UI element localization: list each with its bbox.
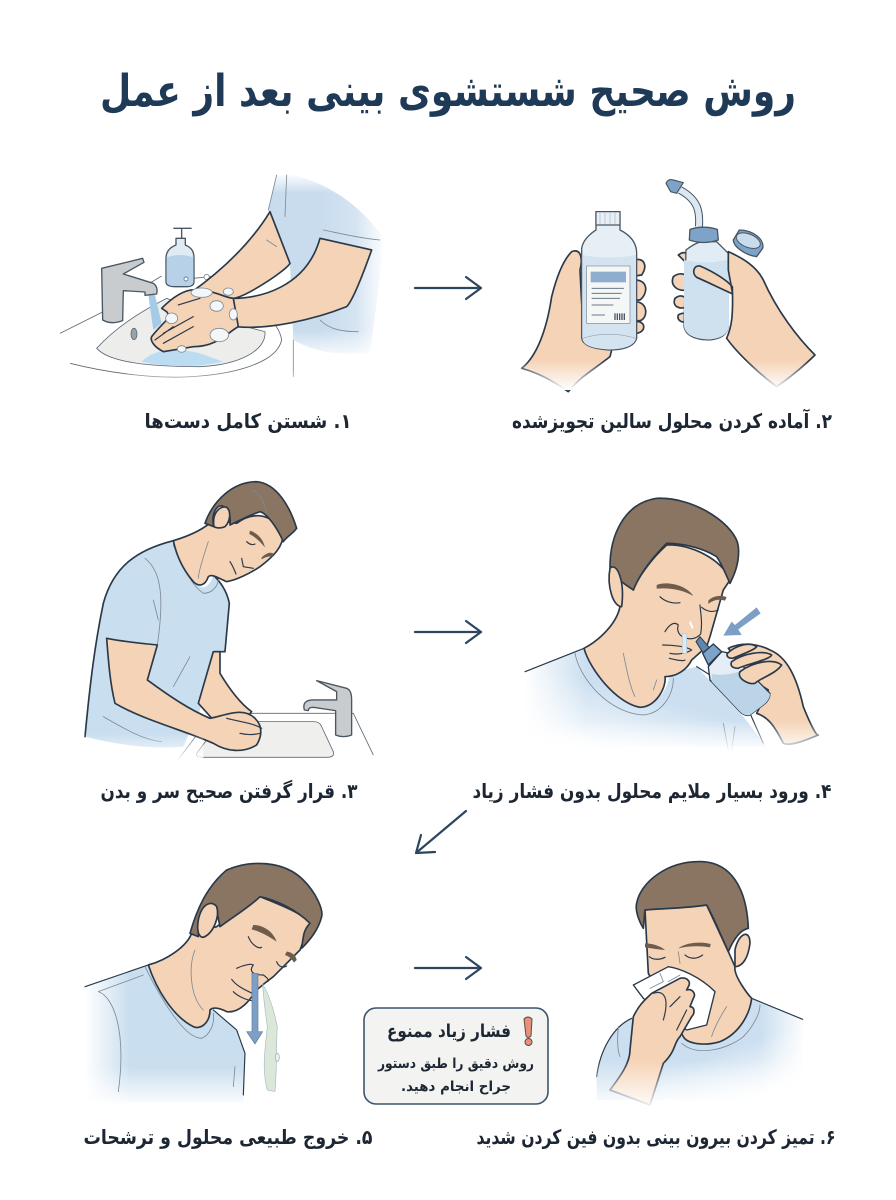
arrow 3 to 4	[415, 621, 481, 643]
callout body: جراح انجام دهید.	[401, 1079, 511, 1095]
illustration: man wiping nose with tissue	[590, 862, 807, 1110]
illustration: hands holding saline bottles	[520, 180, 820, 392]
illustration: man rinsing nose with bottle	[520, 498, 823, 753]
illustration: man leaning over sink	[70, 482, 373, 763]
callout body: روش دقیق را طبق دستور	[377, 1056, 534, 1072]
panel: step 1 wash hands	[60, 173, 387, 433]
illustration: man drains solution	[80, 863, 322, 1107]
panel: step 3 posture	[70, 482, 373, 803]
panel: step 6 gentle cleaning	[476, 862, 836, 1149]
callout body	[377, 1056, 534, 1095]
label 5: ۵. خروج طبیعی محلول و ترشحات	[84, 1125, 372, 1149]
arrow 1 to 2	[415, 277, 481, 299]
label 4: ۴. ورود بسیار ملایم محلول بدون فشار زیاد	[472, 779, 832, 803]
label 1: ۱. شستن کامل دست‌ها	[144, 409, 352, 433]
label 3: ۳. قرار گرفتن صحیح سر و بدن	[101, 779, 358, 803]
panel: step 5 natural drainage	[80, 863, 373, 1149]
arrow 5 to 6	[415, 957, 481, 979]
icon: exclamation mark	[524, 1017, 532, 1046]
callout: no high pressure	[364, 1008, 548, 1104]
panel: step 4 gentle irrigation	[472, 498, 832, 803]
arrow 4 to 5	[416, 811, 466, 853]
illustration: washing hands at sink	[60, 173, 387, 390]
callout heading: فشار زیاد ممنوع	[387, 1021, 511, 1042]
label 2: ۲. آماده کردن محلول سالین تجویزشده	[512, 408, 832, 433]
panel: step 2 prepare solution	[512, 180, 832, 433]
